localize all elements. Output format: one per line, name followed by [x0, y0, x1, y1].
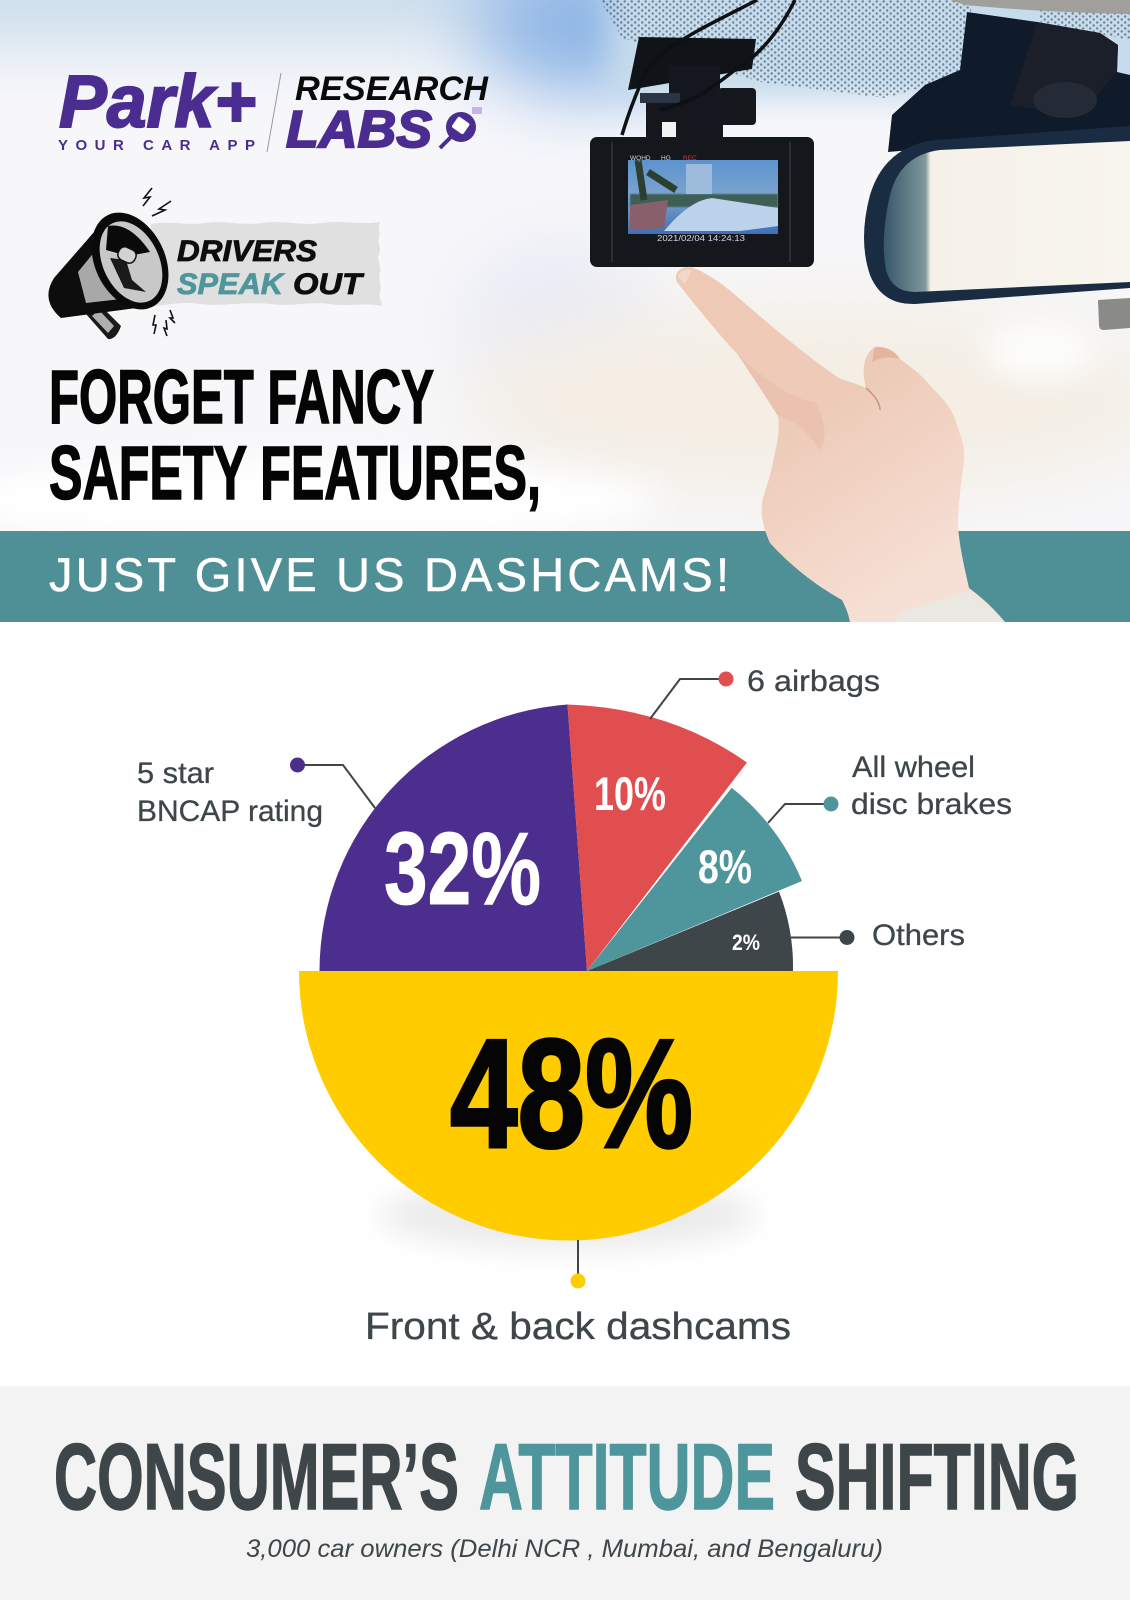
Labs wordmark: LABS	[286, 101, 432, 159]
photo background	[0, 0, 1130, 540]
dashcam	[590, 0, 814, 267]
logo: Park+	[58, 60, 256, 154]
Park+ wordmark: Park+	[59, 60, 256, 143]
rear-view mirror	[864, 126, 1130, 330]
slice: 48% front and back dashcams	[299, 971, 838, 1240]
banner background	[0, 531, 1130, 622]
label: all wheel disc brakes: All wheel	[852, 751, 975, 784]
label: 5 star BNCAP rating: 5 star	[137, 757, 214, 790]
label: front and back dashcams: Front & back dashcams	[365, 1306, 791, 1348]
dashcam status labels	[630, 155, 697, 162]
badge text: drivers: DRIVERS	[177, 235, 317, 268]
label: all wheel disc brakes: disc brakes	[851, 788, 1012, 821]
dashcam status labels: HG	[661, 155, 671, 162]
dashcam mount and cables	[622, 0, 795, 138]
pie chart	[137, 665, 1012, 1348]
slice: 10% 6 airbags	[568, 704, 747, 971]
heading line 2: SAFETY FEATURES,	[49, 431, 541, 516]
label: 6 airbags: 6 airbags	[747, 665, 880, 698]
leader: 6 airbags	[650, 672, 734, 719]
label: others: Others	[872, 919, 965, 952]
pie shadow	[378, 1180, 758, 1250]
dashcam status labels: WQHD	[630, 155, 651, 162]
slice: 8% all wheel disc brakes	[587, 788, 802, 971]
hand pointing at dashcam	[676, 267, 1005, 622]
badge text: out: OUT	[293, 268, 365, 301]
badge text: speak: SPEAK	[177, 268, 285, 301]
footer title: ATTITUDE	[479, 1424, 775, 1529]
label: all wheel disc brakes	[851, 751, 1012, 821]
windshield dot pattern	[600, 0, 1130, 98]
logo divider	[267, 73, 281, 152]
logo: Research Labs	[286, 70, 489, 159]
footer subtitle: 3,000 car owners (Delhi NCR , Mumbai, and Bengaluru)	[246, 1535, 883, 1563]
dashcam status labels: REC	[683, 155, 697, 162]
value: 8%: 8%	[698, 840, 752, 893]
icon: dashcam key	[440, 107, 482, 148]
leader: others	[791, 930, 854, 945]
rear-view mirror mount	[888, 12, 1130, 152]
slice: 2% others	[587, 892, 793, 971]
leader: 5 star	[290, 758, 375, 808]
Park+ tagline: YOUR CAR APP	[58, 137, 255, 154]
banner text: JUST GIVE US DASHCAMS!	[49, 548, 729, 601]
leader: disc brakes	[768, 796, 838, 823]
torn tape	[151, 222, 382, 306]
panel: footer	[0, 1386, 1130, 1600]
icon: megaphone	[48, 200, 184, 339]
icon: sparks	[143, 188, 175, 336]
value: 32%: 32%	[384, 811, 541, 926]
heading line 1: FORGET FANCY	[49, 355, 434, 440]
panel: hero photo	[0, 0, 1130, 622]
dashcam screen	[628, 160, 778, 234]
dashcam body	[590, 137, 814, 267]
footer title: CONSUMER’S	[54, 1424, 459, 1529]
heading	[49, 355, 541, 516]
footer background	[0, 1386, 1130, 1600]
slice: 32% 5 star BNCAP rating	[320, 704, 587, 971]
car headliner	[950, 0, 1130, 14]
dashcam timestamp: 2021/02/04 14:24:13	[657, 233, 745, 243]
label: 5 star BNCAP rating: BNCAP rating	[137, 795, 323, 828]
badge: drivers speak out	[48, 188, 382, 339]
Research wordmark: RESEARCH	[295, 70, 489, 108]
footer title	[54, 1424, 1079, 1529]
value: 2%: 2%	[732, 930, 760, 955]
value: 48%: 48%	[450, 1007, 693, 1180]
value: 10%: 10%	[594, 767, 666, 820]
label: 5 star BNCAP rating	[137, 757, 323, 828]
leader: front and back dashcams	[570, 1240, 586, 1288]
